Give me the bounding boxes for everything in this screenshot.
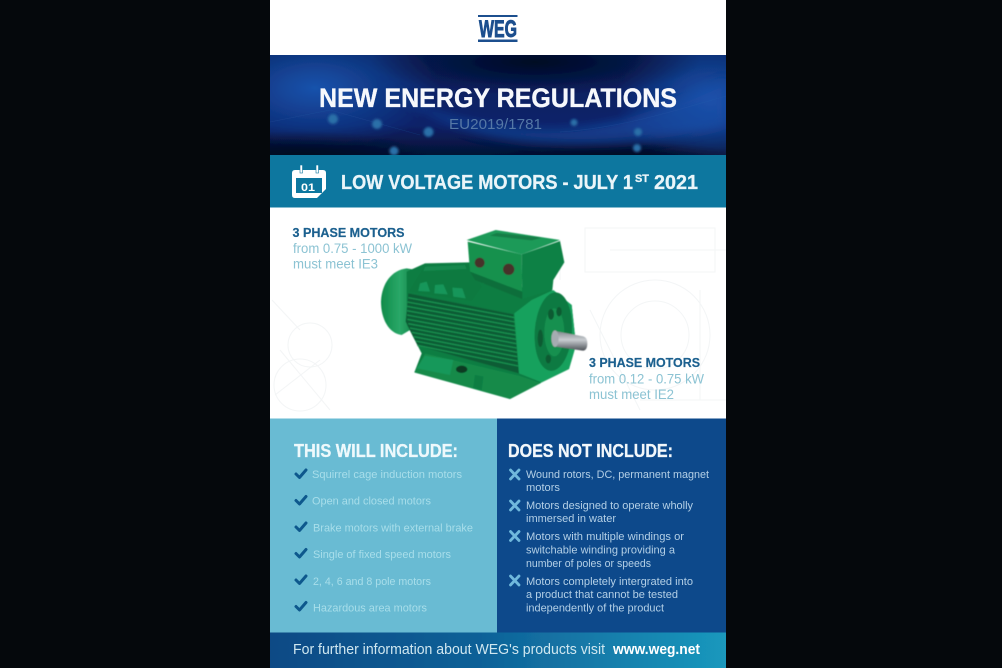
exclusion list: a product that cannot be tested bbox=[526, 589, 678, 601]
exclusion list: switchable winding providing a bbox=[526, 544, 676, 556]
text block: 0.12-0.75 kW motors: 3 PHASE MOTORS bbox=[589, 355, 700, 370]
check icons bbox=[296, 470, 306, 610]
check list: Squirrel cage induction motors bbox=[312, 469, 463, 481]
exclusion list: number of poles or speeds bbox=[526, 558, 651, 570]
check list: Brake motors with external brake bbox=[313, 522, 473, 534]
motor image bbox=[380, 229, 588, 400]
icon: WEG logo bbox=[478, 15, 518, 43]
cooling fins bbox=[406, 293, 519, 373]
exclusion list bbox=[526, 469, 709, 614]
exclusion list: Wound rotors, DC, permanent magnet bbox=[526, 469, 709, 481]
title: NEW ENERGY REGULATIONS bbox=[319, 83, 677, 113]
faint technical drawing background bbox=[272, 228, 726, 411]
upper body ribs bbox=[409, 264, 482, 301]
cable glands bbox=[475, 258, 485, 268]
panel: this will include bbox=[270, 418, 497, 632]
check list: Hazardous area motors bbox=[313, 602, 427, 614]
terminal box bbox=[467, 230, 564, 299]
check list: Open and closed motors bbox=[312, 496, 431, 508]
text block: 0.75-1000 kW motors: from 0.75 - 1000 kW bbox=[293, 241, 412, 256]
icon: calendar bbox=[292, 165, 326, 198]
heading: does not include: DOES NOT INCLUDE: bbox=[508, 441, 673, 461]
exclusion list: motors bbox=[526, 482, 560, 494]
mounting feet bbox=[414, 353, 541, 399]
footer text: www.weg.net bbox=[612, 641, 700, 658]
heading: this will include: THIS WILL INCLUDE: bbox=[294, 441, 458, 461]
poster header: white logo band bbox=[270, 0, 726, 55]
text block: 0.12-0.75 kW motors: must meet IE2 bbox=[589, 387, 674, 402]
text block: 0.12-0.75 kW motors: from 0.12 - 0.75 kW bbox=[589, 372, 704, 386]
front end shield bbox=[514, 290, 576, 382]
subtitle: EU2019/1781 bbox=[449, 116, 542, 133]
heading: low voltage motors: ST bbox=[635, 173, 649, 185]
rear bell bbox=[381, 268, 418, 335]
check list: 2, 4, 6 and 8 pole motors bbox=[313, 576, 431, 588]
check list: Single of fixed speed motors bbox=[313, 549, 451, 561]
heading: low voltage motors: LOW VOLTAGE MOTORS - JULY 1 bbox=[341, 172, 633, 194]
exclusion list: Motors designed to operate wholly bbox=[526, 500, 693, 512]
text block: 0.75-1000 kW motors bbox=[292, 225, 412, 272]
exclusion list: immersed in water bbox=[526, 513, 616, 525]
cross icons bbox=[510, 470, 519, 585]
text block: 0.75-1000 kW motors: must meet IE3 bbox=[293, 256, 378, 272]
date bar bbox=[270, 155, 726, 208]
main body bbox=[407, 262, 576, 399]
footer text: For further information about WEG's products visit bbox=[293, 641, 606, 658]
heading: low voltage motors: 2021 bbox=[654, 172, 698, 194]
footer bbox=[270, 632, 726, 668]
hero banner bbox=[270, 55, 726, 155]
check list bbox=[312, 469, 473, 614]
panel: does not include bbox=[497, 418, 726, 632]
exclusion list: Motors with multiple windings or bbox=[526, 531, 684, 543]
icon: WEG logo: WEG bbox=[479, 16, 517, 43]
shaft bbox=[554, 331, 587, 351]
icon: calendar: 01 bbox=[301, 182, 315, 194]
text block: 0.12-0.75 kW motors bbox=[589, 355, 704, 402]
panel: motor showcase bbox=[270, 208, 726, 418]
exclusion list: independently of the product bbox=[526, 602, 664, 614]
exclusion list: Motors completely intergrated into bbox=[526, 576, 693, 588]
decorative network dots bbox=[328, 114, 642, 156]
text block: 0.75-1000 kW motors: 3 PHASE MOTORS bbox=[292, 225, 405, 240]
